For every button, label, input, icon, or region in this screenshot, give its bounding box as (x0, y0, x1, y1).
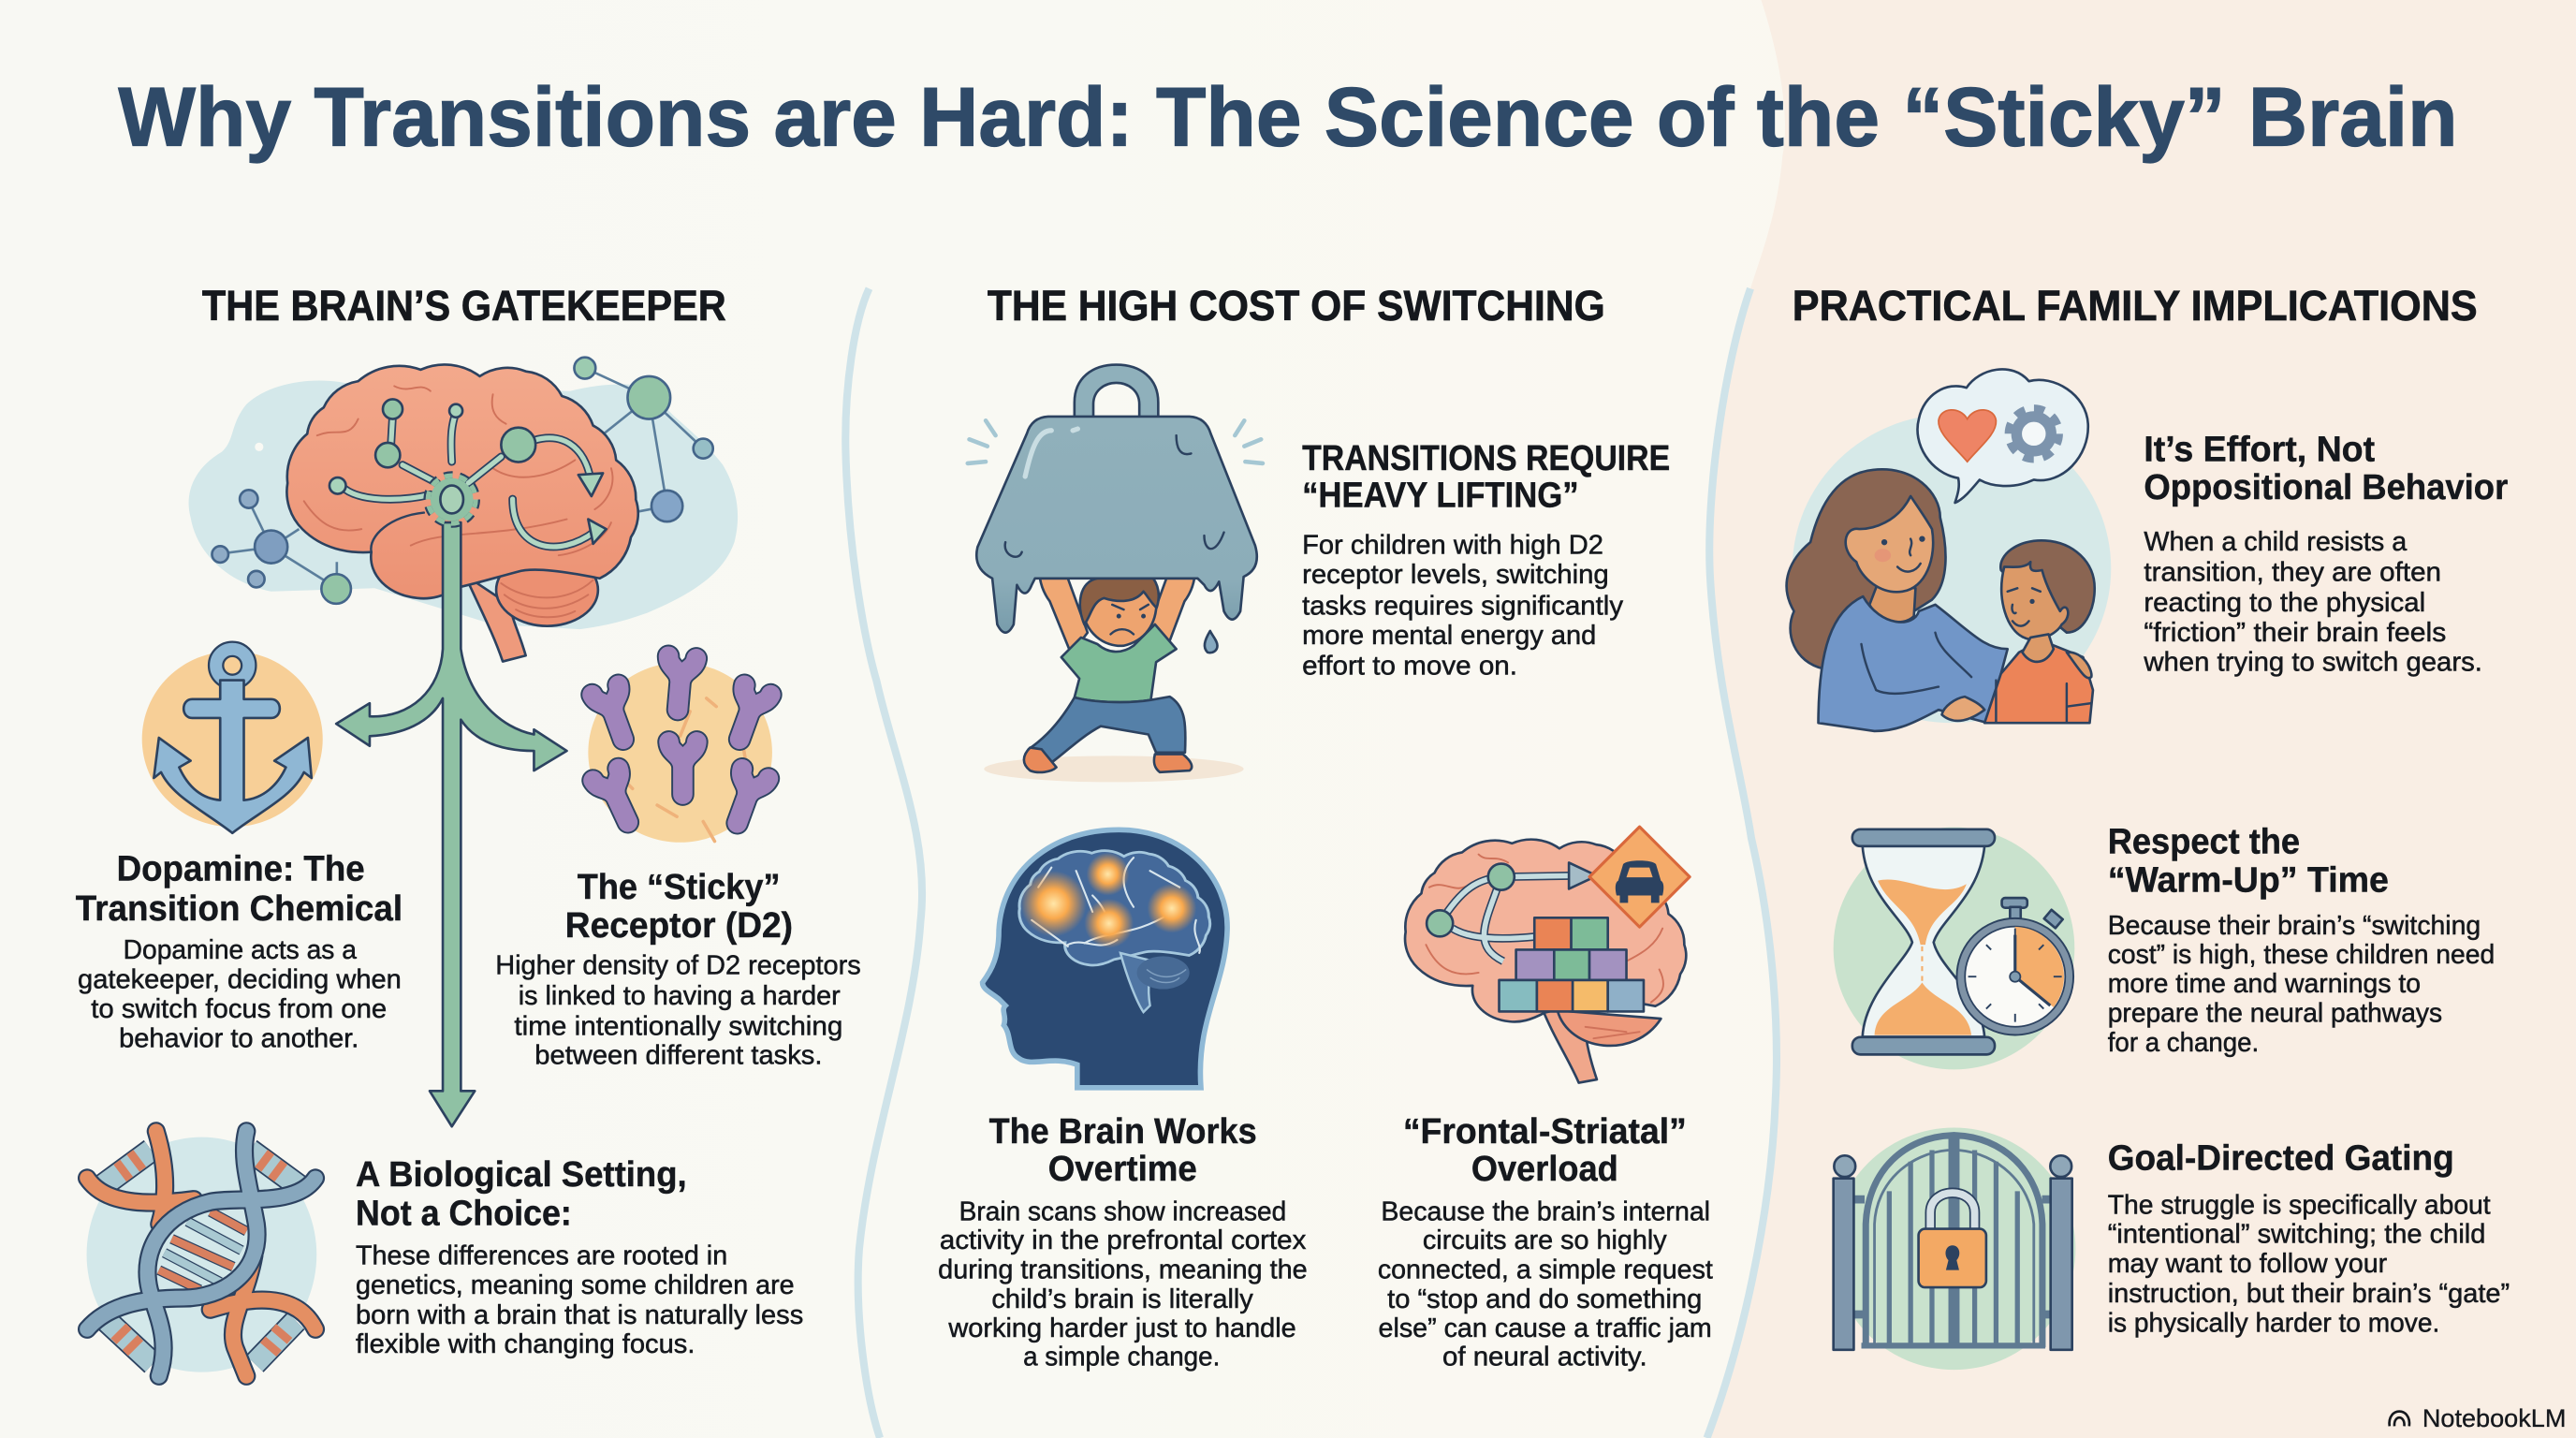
text block: heavy lifting (1302, 438, 1670, 682)
text block: frontal-striatal overload: Overload (1471, 1149, 1618, 1188)
text block: dopamine (76, 849, 402, 1053)
text block: goal-directed gating: may want to follow your (2108, 1249, 2387, 1279)
text block: effort: It’s Effort, Not (2144, 430, 2376, 469)
icon: hourglass and stopwatch (1834, 828, 2074, 1069)
text block: goal-directed gating: “intentional” switching; the child (2108, 1220, 2485, 1250)
text block: sticky receptor: The “Sticky” (578, 867, 781, 906)
text block: sticky receptor: time intentionally switching (514, 1012, 842, 1042)
child (2000, 540, 2095, 633)
text block: dopamine: Dopamine acts as a (124, 935, 358, 965)
parent (1787, 469, 1946, 668)
text block: effort: Oppositional Behavior (2144, 467, 2509, 506)
text block: biological setting: These differences are rooted in (356, 1241, 727, 1271)
text block: dopamine: to switch focus from one (91, 994, 387, 1024)
text block: warm-up time (2108, 822, 2495, 1058)
panel: the brain's gatekeeper (76, 282, 861, 1376)
text block: biological setting: genetics, meaning some children are (356, 1270, 795, 1300)
text block: effort: when trying to switch gears. (2143, 648, 2482, 678)
heading: family implications: PRACTICAL FAMILY IMPLICATIONS (1793, 282, 2478, 330)
text block: heavy lifting: effort to move on. (1302, 652, 1517, 682)
blocks (1500, 917, 1644, 1011)
gate bars (1862, 1136, 2045, 1347)
text block: brain works overtime: activity in the prefrontal cortex (940, 1225, 1307, 1255)
text block: frontal-striatal overload: circuits are so highly (1423, 1225, 1667, 1255)
right divider (1707, 288, 1777, 1438)
text block: warm-up time: cost” is high, these children need (2108, 940, 2495, 970)
text block: heavy lifting: tasks requires significantly (1302, 591, 1624, 621)
text block: effort: reacting to the physical (2144, 588, 2425, 618)
legs (1029, 697, 1185, 769)
text block: goal-directed gating: is physically harder to move. (2108, 1308, 2439, 1338)
text block: biological setting: flexible with changing focus. (356, 1329, 695, 1359)
text block: goal-directed gating: The struggle is specifically about (2108, 1190, 2491, 1220)
arrow: branching pathway from the gear (336, 476, 567, 1126)
panel: the high cost of switching (938, 282, 1713, 1372)
icon: anchor (142, 649, 323, 833)
text block: biological setting: A Biological Setting, (356, 1154, 687, 1194)
text block: brain works overtime (938, 1111, 1308, 1372)
text block: effort: When a child resists a (2144, 527, 2408, 557)
text block: brain works overtime: during transitions, meaning the (938, 1255, 1308, 1284)
neural paths (342, 413, 594, 547)
text block: heavy lifting: receptor levels, switching (1302, 560, 1609, 590)
title: Why Transitions are Hard: The Science of the “Sticky” Brain (118, 69, 2458, 163)
text block: biological setting: Not a Choice: (356, 1193, 572, 1232)
text block: goal-directed gating: instruction, but their brain’s “gate” (2108, 1279, 2510, 1309)
icon: parent comforting child (1787, 369, 2111, 731)
text block: brain works overtime: child’s brain is literally (991, 1284, 1253, 1314)
text block: frontal-striatal overload: Because the brain’s internal (1381, 1196, 1710, 1226)
text block: warm-up time: for a change. (2108, 1028, 2259, 1058)
text block: warm-up time: Because their brain’s “switching (2108, 911, 2481, 941)
text block: dopamine: Dopamine: The (117, 849, 365, 888)
text block: warm-up time: Respect the (2108, 822, 2300, 861)
text block: brain works overtime: Brain scans show increased (959, 1196, 1286, 1226)
text block: warm-up time: prepare the neural pathways (2108, 999, 2442, 1029)
arms (1040, 579, 1194, 654)
road sign (1589, 827, 1690, 927)
text block: brain works overtime: a simple change. (1023, 1342, 1220, 1372)
text block: goal-directed gating (2108, 1138, 2510, 1338)
ladder bands (102, 1151, 299, 1364)
panel: practical family implications (1787, 282, 2510, 1370)
speech bubble (1917, 369, 2088, 503)
icon: D2 receptors (588, 656, 772, 843)
text block: dopamine: Transition Chemical (76, 888, 402, 928)
text block: effort: transition, they are often (2144, 558, 2441, 588)
text block: frontal-striatal overload: connected, a simple request (1378, 1255, 1713, 1284)
icon: locked gate (1833, 1127, 2075, 1370)
left divider (845, 288, 922, 1438)
text block: brain works overtime: The Brain Works (989, 1111, 1257, 1151)
text block: biological setting (356, 1154, 803, 1359)
text block: frontal-striatal overload: “Frontal-Striatal” (1403, 1111, 1687, 1151)
text block: sticky receptor (495, 867, 861, 1070)
logo: NotebookLM: NotebookLM (2422, 1403, 2566, 1432)
text block: dopamine: behavior to another. (119, 1023, 359, 1053)
text block: sticky receptor: between different tasks. (534, 1040, 822, 1070)
text block: sticky receptor: is linked to having a harder (519, 981, 841, 1011)
text block: brain works overtime: Overtime (1048, 1149, 1197, 1188)
icon: DNA helix (87, 1131, 316, 1376)
text block: warm-up time: more time and warnings to (2108, 969, 2421, 999)
text block: effort (2143, 430, 2509, 678)
heading: gatekeeper: THE BRAIN’S GATEKEEPER (202, 282, 726, 330)
text block: brain works overtime: working harder just to handle (947, 1313, 1296, 1343)
stopwatch (1956, 898, 2073, 1034)
text block: frontal-striatal overload: to “stop and do something (1387, 1284, 1702, 1314)
icon: brain with neural pathways (189, 358, 738, 662)
weight (1075, 365, 1158, 418)
text block: sticky receptor: Higher density of D2 receptors (495, 951, 861, 981)
icon: brain with block traffic jam (1405, 827, 1690, 1083)
text block: heavy lifting: TRANSITIONS REQUIRE (1302, 438, 1670, 477)
pathways (1440, 875, 1569, 961)
icon: head silhouette with glowing brain (983, 829, 1227, 1088)
text block: goal-directed gating: Goal-Directed Gating (2108, 1138, 2454, 1178)
text block: heavy lifting: For children with high D2 (1302, 530, 1603, 560)
padlock (1930, 1193, 1975, 1229)
text block: heavy lifting: “HEAVY LIFTING” (1302, 476, 1579, 515)
text block: dopamine: gatekeeper, deciding when (78, 965, 402, 995)
text block: frontal-striatal overload (1378, 1111, 1713, 1372)
icon: child lifting a melting weight (968, 365, 1263, 782)
text block: warm-up time: “Warm-Up” Time (2108, 860, 2389, 900)
text block: frontal-striatal overload: else” can cause a traffic jam (1379, 1313, 1712, 1343)
gate posts (1834, 1155, 2072, 1350)
text block: sticky receptor: Receptor (D2) (565, 905, 793, 945)
text block: effort: “friction” their brain feels (2144, 618, 2446, 648)
torso (1061, 624, 1177, 702)
heading: switching cost: THE HIGH COST OF SWITCHING (988, 282, 1605, 330)
text block: frontal-striatal overload: of neural activity. (1442, 1342, 1647, 1372)
text block: biological setting: born with a brain that is naturally less (356, 1300, 803, 1330)
molecule lines (220, 368, 703, 588)
central rungs (159, 1211, 246, 1290)
head (1083, 583, 1157, 646)
text block: heavy lifting: more mental energy and (1302, 621, 1596, 651)
